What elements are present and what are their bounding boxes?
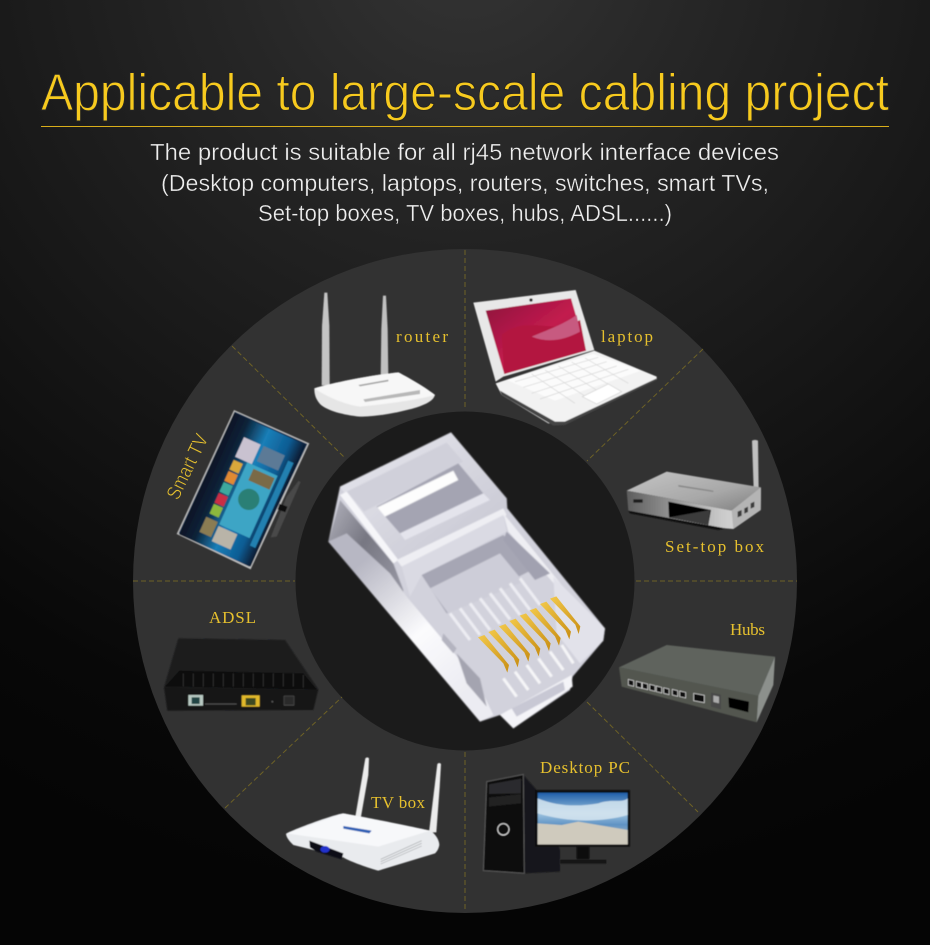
subtitle text block — [150, 139, 779, 226]
plug left side — [328, 500, 403, 627]
icon: tv box — [286, 757, 441, 871]
title: Applicable to large-scale cabling project — [41, 64, 890, 122]
plug highlight edges — [340, 492, 398, 563]
plug latch window — [377, 463, 483, 533]
plug contact ribs — [450, 578, 540, 640]
label: hubs: Hubs — [730, 620, 765, 639]
label: adsl: ADSL — [209, 608, 256, 627]
label: laptop: laptop — [601, 327, 653, 346]
label: tv box: TV box — [371, 793, 426, 812]
label: smart tv: Smart TV — [163, 430, 213, 503]
icon: laptop — [473, 290, 657, 426]
plug shadow mottling — [457, 653, 487, 707]
plug recess — [422, 535, 535, 613]
icon: smart tv — [177, 410, 309, 569]
plug right face — [553, 577, 605, 663]
icon: adsl modem — [164, 638, 318, 711]
label: desktop pc: Desktop PC — [540, 758, 630, 777]
plug lower-left band — [328, 533, 493, 722]
plug middle band — [402, 515, 507, 597]
subtitle text block: (Desktop computers, laptops, routers, switches, smart TVs, — [161, 170, 769, 196]
title underline — [41, 126, 889, 127]
subtitle text block: The product is suitable for all rj45 network interface devices — [150, 139, 779, 165]
plug silhouette — [328, 432, 605, 728]
label: router: router — [396, 327, 448, 346]
panel: device wheel — [133, 249, 797, 913]
icon: network hub — [619, 645, 775, 722]
gold contacts — [478, 596, 580, 673]
plug latch block — [340, 432, 507, 563]
label: set-top box: Set-top box — [665, 537, 764, 556]
icon: set-top box — [627, 440, 761, 530]
icon: desktop pc — [483, 774, 630, 873]
plug front tab — [500, 675, 573, 728]
subtitle text block: Set-top boxes, TV boxes, hubs, ADSL......) — [258, 200, 672, 226]
inner hub circle — [296, 412, 634, 750]
plug teeth front — [503, 645, 573, 697]
hero image: rj45 plug — [328, 432, 605, 728]
plug body shading — [328, 432, 605, 728]
outer ring — [133, 249, 797, 913]
icon: router — [314, 293, 435, 417]
